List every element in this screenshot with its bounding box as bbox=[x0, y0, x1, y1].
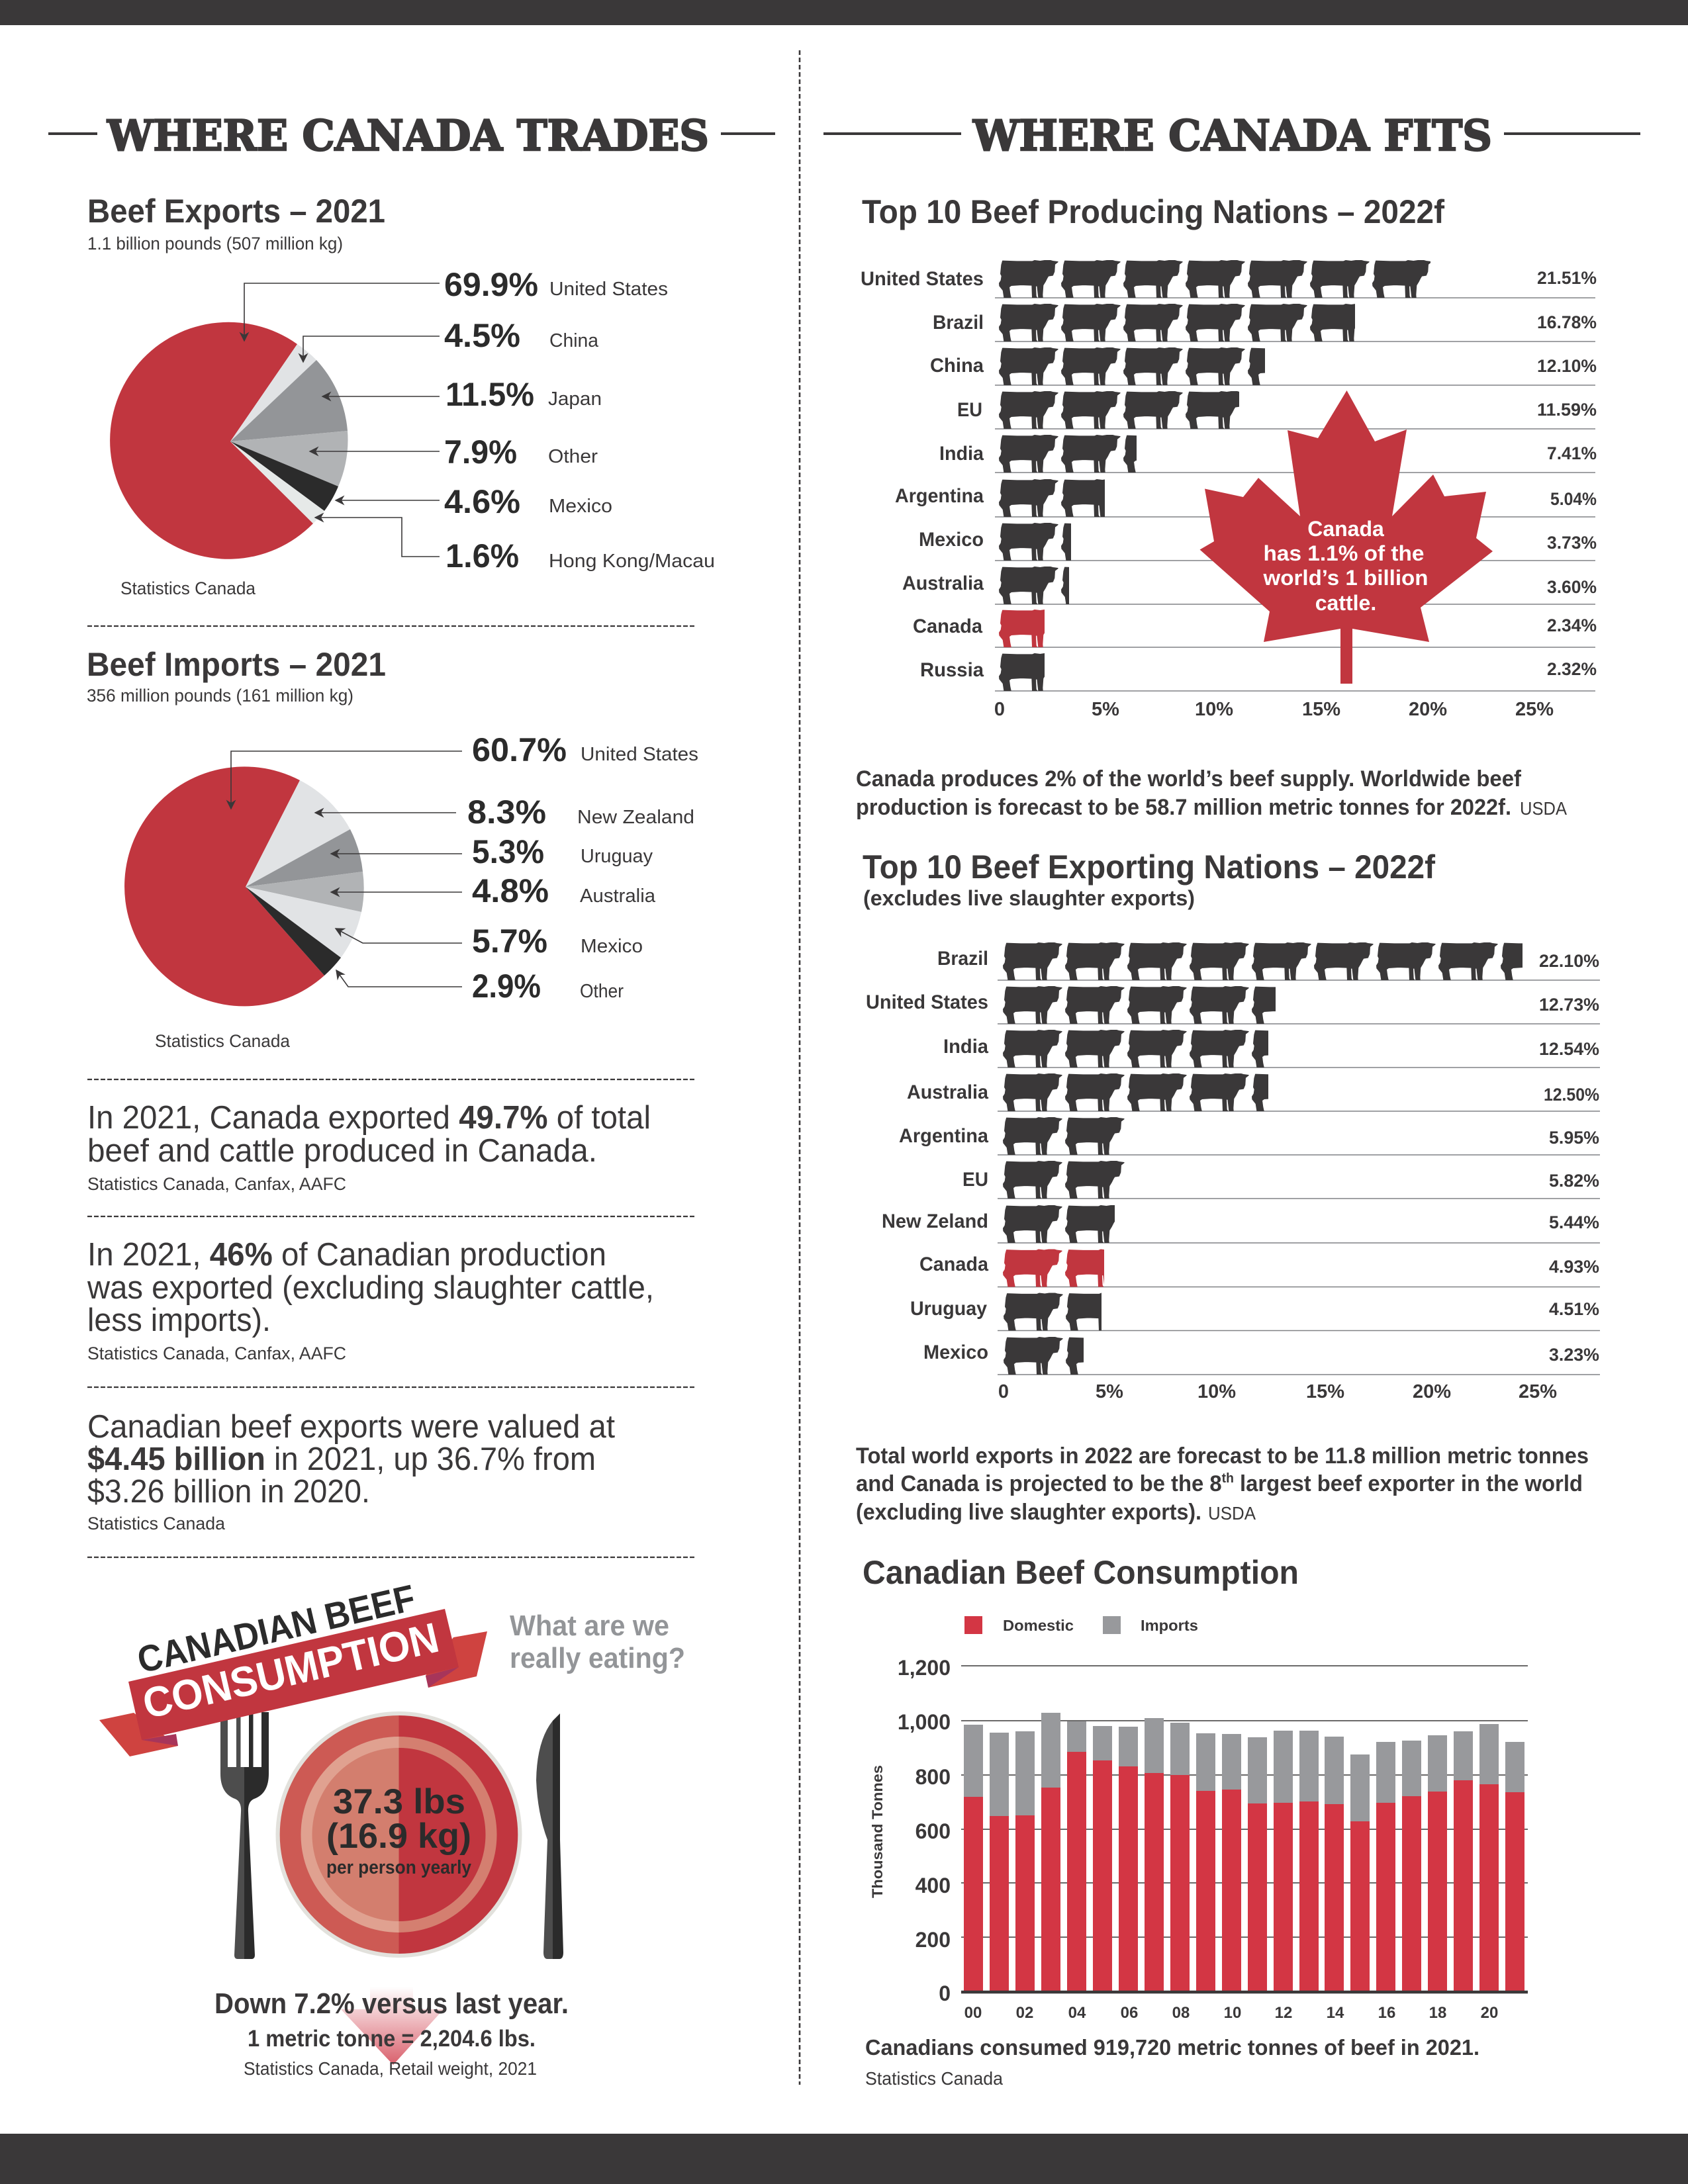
panel: top 10 exporters bbox=[863, 848, 1600, 1402]
row values: producers bbox=[1537, 268, 1597, 679]
icon: maple leaf callout bbox=[1199, 390, 1493, 684]
x axis labels: years bbox=[964, 2004, 1498, 2022]
heading: beef exports: Beef Exports – 2021 bbox=[87, 193, 385, 230]
x axis labels: years: 12 bbox=[1275, 2004, 1292, 2022]
ribbon banner: CONSUMPTION bbox=[138, 1614, 443, 1728]
text block: production exported: was exported (excluding slaughter cattle, bbox=[87, 1270, 654, 1306]
row labels: producers: Australia bbox=[902, 572, 984, 594]
x axis labels: years: 08 bbox=[1172, 2004, 1190, 2022]
plate figure: per person yearly bbox=[326, 1857, 471, 1878]
row labels: exporters: Mexico bbox=[923, 1342, 988, 1363]
x axis: exporters bbox=[998, 1381, 1557, 1402]
row labels: producers: China bbox=[930, 355, 984, 377]
x axis: exporters: 10% bbox=[1197, 1381, 1236, 1402]
row values: exporters: 12.50% bbox=[1544, 1085, 1599, 1105]
x axis: exporters: 5% bbox=[1096, 1381, 1123, 1402]
heading: top 10 producers: Top 10 Beef Producing Nations – 2022f bbox=[862, 193, 1444, 230]
row values: exporters: 5.95% bbox=[1549, 1128, 1599, 1148]
x axis: producers: 0 bbox=[994, 699, 1005, 720]
y axis labels: 400 bbox=[915, 1874, 951, 1897]
x axis: exporters: 0 bbox=[998, 1381, 1009, 1402]
text block: export value: $4.45 billion in 2021, up 36.7% from bbox=[87, 1441, 596, 1477]
x axis: exporters: 20% bbox=[1413, 1381, 1451, 1402]
import labels: New Zealand bbox=[577, 807, 694, 828]
x axis labels: years: 02 bbox=[1016, 2004, 1033, 2022]
import labels: United States bbox=[581, 744, 698, 765]
arrow: down bbox=[341, 1987, 444, 2065]
row values: exporters: 4.51% bbox=[1549, 1299, 1599, 1319]
text block: production note: production is forecast to be 58.7 million metric tonnes for 2022f. bbox=[856, 795, 1511, 820]
text block: exports note: largest beef exporter in the world bbox=[1234, 1471, 1583, 1496]
x axis labels: years: 06 bbox=[1121, 2004, 1138, 2022]
export labels: Japan bbox=[548, 388, 602, 410]
import labels: 8.3% bbox=[467, 794, 546, 831]
y axis labels: 600 bbox=[915, 1819, 951, 1843]
x axis: exporters: 15% bbox=[1306, 1381, 1344, 1402]
pie chart: exports bbox=[110, 322, 348, 559]
text block: share exported: beef and cattle produced in Canada. bbox=[87, 1133, 597, 1169]
x axis labels: years: 16 bbox=[1378, 2004, 1395, 2022]
consumption change text: 1 metric tonne = 2,204.6 lbs. bbox=[248, 2026, 536, 2052]
row labels: producers: India bbox=[939, 443, 984, 465]
row labels: exporters: New Zeland bbox=[882, 1210, 988, 1232]
pictogram chart: producers bbox=[995, 260, 1595, 691]
row values: exporters: 5.82% bbox=[1549, 1171, 1599, 1191]
row values: producers: 11.59% bbox=[1537, 400, 1597, 420]
x axis: producers bbox=[994, 699, 1554, 720]
y axis labels: 0 bbox=[939, 1981, 951, 2005]
y axis title: Thousand Tonnes bbox=[869, 1765, 886, 1898]
import labels: Mexico bbox=[581, 936, 643, 957]
row values: producers: 5.04% bbox=[1550, 489, 1597, 509]
consumption note: Canadians consumed 919,720 metric tonnes of beef in 2021. bbox=[865, 2035, 1479, 2060]
panel: beef imports bbox=[87, 646, 698, 1051]
row labels: exporters: Argentina bbox=[899, 1125, 988, 1147]
text block: export value: $3.26 billion in 2020. bbox=[87, 1474, 370, 1510]
text block: exports note bbox=[856, 1443, 1589, 1525]
row values: producers: 2.32% bbox=[1547, 659, 1597, 679]
icon: maple leaf callout: Canada bbox=[1307, 517, 1384, 541]
icon: fork bbox=[220, 1711, 269, 1959]
import labels: 60.7% bbox=[472, 731, 567, 768]
text block: exports note: USDA bbox=[1208, 1503, 1256, 1524]
heading: beef imports: Beef Imports – 2021 bbox=[87, 646, 386, 683]
export labels bbox=[444, 266, 715, 574]
x axis: producers: 5% bbox=[1092, 699, 1119, 720]
text block: export value: Statistics Canada bbox=[87, 1514, 226, 1533]
subtitle: import volume: 356 million pounds (161 million kg) bbox=[87, 686, 353, 705]
x axis labels: years: 00 bbox=[964, 2004, 982, 2022]
row labels: exporters: India bbox=[943, 1036, 988, 1058]
text block: share exported: Statistics Canada, Canfax, AAFC bbox=[87, 1174, 346, 1194]
row values: exporters: 3.23% bbox=[1549, 1345, 1599, 1365]
plate figure: 37.3 lbs bbox=[333, 1782, 465, 1821]
x axis labels: years: 14 bbox=[1327, 2004, 1344, 2022]
row labels: producers: United States bbox=[861, 268, 984, 290]
x axis labels: years: 04 bbox=[1068, 2004, 1086, 2022]
x axis: producers: 20% bbox=[1409, 699, 1447, 720]
import labels bbox=[467, 731, 698, 1005]
legend bbox=[964, 1616, 1198, 1634]
text block: share exported bbox=[87, 1100, 651, 1194]
callout: what are we really eating: What are we bbox=[510, 1610, 669, 1642]
panel: top 10 producers bbox=[861, 193, 1597, 720]
row labels: producers: Canada bbox=[913, 615, 982, 637]
legend: Domestic bbox=[1003, 1617, 1074, 1634]
icon: plate bbox=[275, 1711, 522, 1958]
ribbon banner bbox=[99, 1576, 487, 1756]
row values: exporters bbox=[1539, 951, 1599, 1365]
export labels: 4.5% bbox=[444, 317, 520, 354]
subtitle: export volume: 1.1 billion pounds (507 million kg) bbox=[87, 234, 343, 253]
text block: share exported: In 2021, Canada exported 49.7% of total bbox=[87, 1100, 651, 1136]
export labels: Other bbox=[548, 446, 598, 467]
row values: exporters: 12.73% bbox=[1539, 995, 1599, 1015]
row labels: exporters: Canada bbox=[919, 1253, 988, 1275]
text block: production exported: less imports). bbox=[87, 1302, 271, 1338]
row labels: producers: Mexico bbox=[919, 529, 984, 551]
text block: exports note: th bbox=[1222, 1471, 1234, 1486]
export labels: China bbox=[549, 330, 599, 351]
pictogram chart: exporters bbox=[998, 942, 1600, 1375]
text block: exports note: Total world exports in 2022 are forecast to be 11.8 million metric tonnes bbox=[856, 1443, 1589, 1469]
callout: what are we really eating: really eating? bbox=[510, 1642, 685, 1674]
row labels: producers: Argentina bbox=[895, 485, 984, 507]
text block: production note: USDA bbox=[1520, 798, 1567, 819]
import labels: Other bbox=[580, 981, 624, 1002]
export labels: 7.9% bbox=[444, 433, 517, 471]
x axis: producers: 10% bbox=[1195, 699, 1233, 720]
x axis labels: years: 10 bbox=[1224, 2004, 1241, 2022]
text block: exports note: (excluding live slaughter exports). bbox=[856, 1500, 1201, 1525]
export labels: 1.6% bbox=[445, 537, 519, 574]
icon: knife bbox=[536, 1713, 563, 1959]
row values: producers: 12.10% bbox=[1537, 356, 1597, 376]
y axis labels: 1,000 bbox=[898, 1710, 951, 1734]
heading: where canada trades: WHERE CANADA TRADES bbox=[107, 111, 709, 161]
text block: production exported: Statistics Canada, Canfax, AAFC bbox=[87, 1343, 346, 1363]
row labels: producers: Brazil bbox=[933, 312, 984, 334]
heading: where canada fits: WHERE CANADA FITS bbox=[972, 111, 1492, 161]
text block: production exported: In 2021, 46% of Canadian production bbox=[87, 1237, 606, 1273]
export labels: 69.9% bbox=[444, 266, 538, 303]
text block: exports note: and Canada is projected to be the 8 bbox=[856, 1471, 1235, 1496]
consumption note bbox=[865, 2035, 1479, 2089]
row values: exporters: 5.44% bbox=[1549, 1212, 1599, 1232]
consumption change text: Down 7.2% versus last year. bbox=[214, 1987, 569, 2020]
icon: maple leaf callout: world’s 1 billion bbox=[1262, 566, 1429, 590]
x axis: producers: 25% bbox=[1515, 699, 1554, 720]
row values: producers: 3.73% bbox=[1547, 533, 1597, 553]
consumption note: Statistics Canada bbox=[865, 2068, 1003, 2089]
source: exports: Statistics Canada bbox=[120, 578, 256, 598]
y axis labels: 800 bbox=[915, 1765, 951, 1789]
import labels: Uruguay bbox=[581, 846, 653, 867]
row values: producers: 7.41% bbox=[1547, 443, 1597, 463]
consumption change text bbox=[214, 1987, 569, 2079]
import labels: 5.7% bbox=[472, 923, 547, 960]
row labels: exporters: Uruguay bbox=[910, 1298, 987, 1320]
icon: maple leaf callout: cattle. bbox=[1315, 591, 1376, 615]
export labels: 11.5% bbox=[445, 376, 534, 413]
plate figure bbox=[326, 1782, 471, 1878]
text block: production exported bbox=[87, 1237, 654, 1363]
leader lines: exports bbox=[244, 283, 440, 557]
panel: beef exports bbox=[87, 193, 715, 598]
row values: producers: 3.60% bbox=[1547, 577, 1597, 597]
text block: export value bbox=[87, 1409, 615, 1533]
leader lines: imports bbox=[231, 751, 462, 987]
export labels: United States bbox=[549, 279, 668, 300]
import labels: Australia bbox=[580, 886, 656, 907]
heading: top 10 exporters: Top 10 Beef Exporting Nations – 2022f bbox=[863, 848, 1435, 886]
import labels: 2.9% bbox=[472, 968, 541, 1005]
export labels: 4.6% bbox=[444, 483, 520, 520]
consumption change text: Statistics Canada, Retail weight, 2021 bbox=[244, 2058, 537, 2079]
y axis labels: 1,200 bbox=[898, 1656, 951, 1680]
export labels: Mexico bbox=[549, 496, 612, 517]
pie chart: imports bbox=[124, 766, 364, 1006]
x axis labels: years: 20 bbox=[1481, 2004, 1498, 2022]
plate figure: (16.9 kg) bbox=[326, 1817, 471, 1856]
row values: producers: 21.51% bbox=[1537, 268, 1597, 288]
y axis labels bbox=[898, 1656, 951, 2005]
row labels: exporters bbox=[866, 948, 988, 1363]
x axis: exporters: 25% bbox=[1519, 1381, 1557, 1402]
callout: what are we really eating bbox=[510, 1610, 685, 1674]
row values: producers: 16.78% bbox=[1537, 312, 1597, 332]
stacked bar chart bbox=[961, 1666, 1528, 1992]
ribbon banner: CANADIAN BEEF bbox=[134, 1576, 419, 1681]
import labels: 4.8% bbox=[472, 872, 549, 909]
panel: consumption chart bbox=[863, 1554, 1528, 2089]
row labels: exporters: Brazil bbox=[937, 948, 988, 970]
row values: exporters: 22.10% bbox=[1539, 951, 1599, 971]
row labels: exporters: United States bbox=[866, 991, 988, 1013]
row labels: producers: Russia bbox=[920, 659, 984, 681]
text block: export value: Canadian beef exports were valued at bbox=[87, 1409, 615, 1445]
x axis: producers: 15% bbox=[1302, 699, 1340, 720]
row values: exporters: 4.93% bbox=[1549, 1257, 1599, 1277]
row values: producers: 2.34% bbox=[1547, 615, 1597, 635]
source: imports: Statistics Canada bbox=[155, 1031, 291, 1051]
row labels: exporters: EU bbox=[962, 1169, 988, 1191]
legend: Imports bbox=[1141, 1617, 1198, 1634]
text block: production note: Canada produces 2% of the world’s beef supply. Worldwide beef bbox=[856, 766, 1522, 792]
row labels: producers: EU bbox=[957, 399, 982, 421]
subtitle: exporters: (excludes live slaughter exports) bbox=[863, 886, 1195, 910]
icon: maple leaf callout: has 1.1% of the bbox=[1263, 541, 1425, 565]
top bar bbox=[0, 0, 1688, 25]
row labels: exporters: Australia bbox=[907, 1081, 988, 1103]
export labels: Hong Kong/Macau bbox=[549, 551, 715, 572]
text block: production note bbox=[856, 766, 1567, 820]
import labels: 5.3% bbox=[472, 833, 544, 870]
column divider bbox=[799, 50, 800, 2085]
row values: exporters: 12.54% bbox=[1539, 1039, 1599, 1059]
panel: canadian beef consumption graphic bbox=[99, 1576, 685, 2079]
y axis labels: 200 bbox=[915, 1928, 951, 1952]
x axis labels: years: 18 bbox=[1429, 2004, 1446, 2022]
bottom bar bbox=[0, 2134, 1688, 2184]
row labels: producers bbox=[861, 268, 984, 681]
heading: consumption: Canadian Beef Consumption bbox=[863, 1554, 1299, 1591]
